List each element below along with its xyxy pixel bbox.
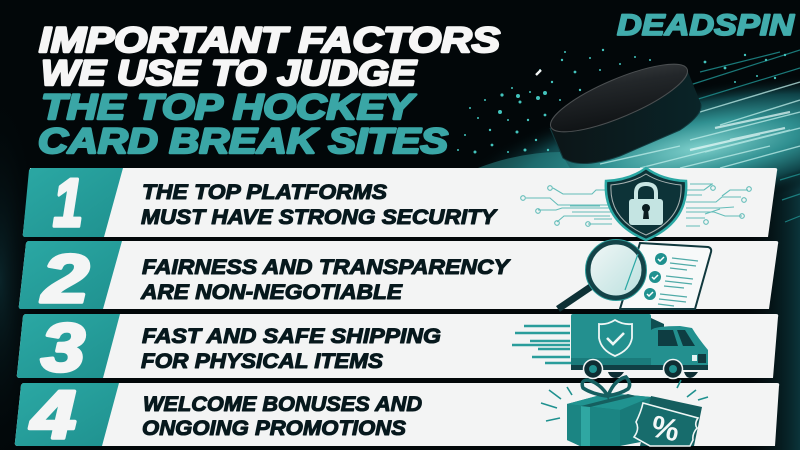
title line 1: IMPORTANT FACTORS: [39, 21, 500, 60]
factor 3 text: FAST AND SAFE SHIPPING: [142, 324, 441, 348]
factor 1 text: THE TOP PLATFORMS: [142, 180, 388, 204]
logo: Deadspin: DEADSPIN: [617, 9, 796, 42]
panel: factor 4: [15, 377, 779, 450]
factor 3 text: [141, 324, 441, 373]
number 1: 1: [53, 165, 83, 241]
icon: magnifying glass: [558, 240, 646, 309]
factor 2 text: FAIRNESS AND TRANSPARENCY: [142, 255, 511, 279]
factor 2 text: [140, 255, 511, 304]
icon: circuit lines: [521, 184, 751, 226]
icon: discount ticket: [634, 396, 702, 448]
factor 3 text: FOR PHYSICAL ITEMS: [141, 349, 384, 373]
factor 4 text: ONGOING PROMOTIONS: [142, 416, 407, 440]
factor 4 text: [142, 392, 422, 440]
hockey puck: [543, 52, 701, 164]
panel: factor 2: [19, 241, 778, 317]
number badge 4: [15, 383, 119, 446]
factor 1 text: MUST HAVE STRONG SECURITY: [141, 205, 498, 229]
factor 4 text: WELCOME BONUSES AND: [143, 392, 422, 416]
factor 2 text: ARE NON-NEGOTIABLE: [140, 280, 403, 304]
icon: gift box: [541, 377, 708, 446]
icon: security shield with padlock: [606, 168, 686, 240]
number badge 2: [19, 241, 122, 309]
title line 2: WE USE TO JUDGE: [41, 54, 418, 93]
number 3: 3: [41, 310, 85, 386]
title line 4: CARD BREAK SITES: [38, 122, 448, 161]
title: [38, 21, 500, 161]
factor 1 text: [141, 180, 498, 229]
ice spray streaks and particles: [457, 49, 800, 222]
panel: factor 1: [23, 165, 777, 241]
icon: delivery truck with speed lines: [512, 314, 708, 378]
icon: checklist document: [620, 243, 711, 309]
panel: factor 3: [17, 310, 778, 386]
title line 3: THE TOP HOCKEY: [41, 88, 416, 127]
icon: discount ticket: %: [648, 408, 683, 448]
number badge 3: [17, 314, 120, 378]
number badge 1: [23, 168, 123, 237]
number 2: 2: [40, 241, 89, 317]
